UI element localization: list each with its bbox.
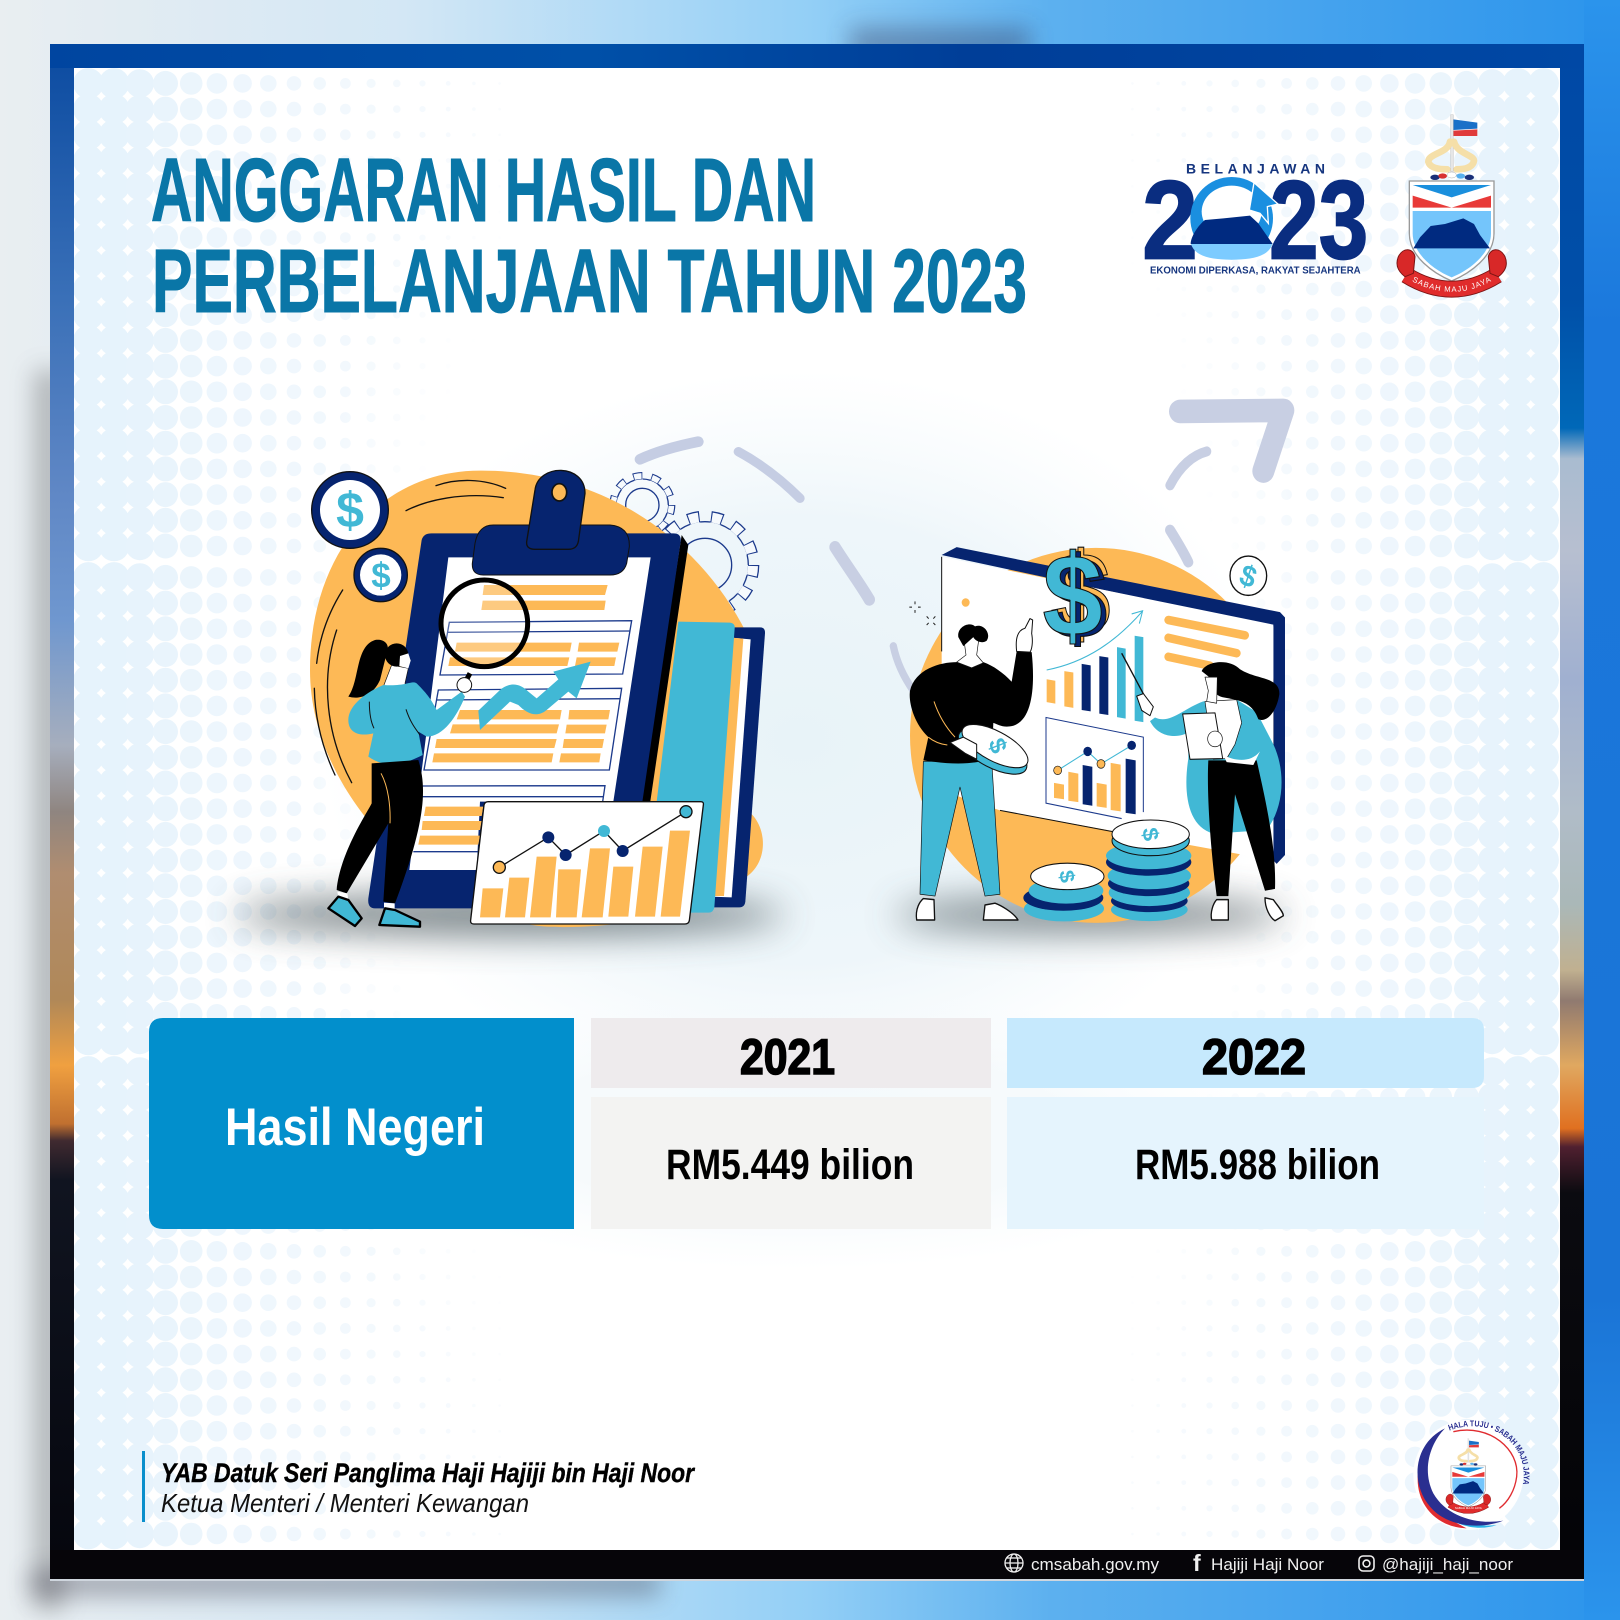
gears bbox=[613, 476, 754, 614]
man with coin: $ bbox=[983, 735, 1012, 758]
book and folder bbox=[643, 622, 765, 913]
logo: Hala Tuju Sabah Maju Jaya: HALA TUJU • SABAH MAJU JAYA bbox=[1448, 1420, 1530, 1484]
illustration: clipboard analysis bbox=[310, 442, 800, 927]
logo: Sabah state crest bbox=[1396, 114, 1507, 298]
2021 header bbox=[591, 1018, 991, 1088]
dashed arc marks bbox=[640, 442, 800, 498]
orange backdrop bbox=[910, 548, 1282, 923]
logo: Belanjawan 2023: BELANJAWAN bbox=[1186, 160, 1325, 176]
2022 header: 2022 bbox=[1202, 1029, 1306, 1085]
footer social links: @hajiji_haji_noor bbox=[1382, 1555, 1513, 1574]
table: Hasil Negeri bbox=[149, 1018, 1484, 1229]
magnifier bbox=[441, 580, 528, 687]
title: PERBELANJAAN TAHUN 2023 bbox=[152, 232, 1027, 332]
sparkles bbox=[909, 601, 935, 625]
board text lines bbox=[1168, 620, 1245, 666]
attribution: YAB Datuk Seri Panglima Haji Hajiji bin Haji Noor bbox=[161, 1458, 695, 1488]
2022 header bbox=[1007, 1018, 1484, 1088]
man with coin bbox=[910, 619, 1033, 920]
small coin: $ bbox=[1235, 559, 1260, 595]
logo: Hala Tuju Sabah Maju Jaya: SABAH MAJU JAYA bbox=[1455, 1506, 1482, 1510]
chart card bbox=[471, 802, 703, 924]
attribution: Ketua Menteri / Menteri Kewangan bbox=[161, 1488, 529, 1518]
coins: $ bbox=[336, 482, 364, 538]
coin stacks bbox=[1023, 820, 1191, 921]
logo: Belanjawan 2023: EKONOMI DIPERKASA, RAKYAT SEJAHTERA bbox=[1150, 265, 1361, 276]
dollar sign: $ bbox=[1047, 532, 1107, 663]
2022 value bbox=[1007, 1097, 1484, 1229]
illustration: presentation board bbox=[835, 410, 1285, 923]
title bbox=[151, 141, 1027, 332]
dollar sign: $ bbox=[1051, 528, 1111, 658]
icon: globe bbox=[1005, 1554, 1023, 1572]
document rows bbox=[418, 585, 619, 845]
2021 value: RM5.449 bilion bbox=[666, 1141, 914, 1189]
logo: Hala Tuju Sabah Maju Jaya bbox=[1414, 1420, 1530, 1530]
coins: $ bbox=[371, 556, 391, 595]
presentation board bbox=[942, 547, 1285, 864]
2021 header: 2021 bbox=[740, 1029, 835, 1085]
upward arrow marks bbox=[835, 410, 1283, 691]
small chart bbox=[1046, 717, 1143, 819]
row label cell bbox=[149, 1018, 574, 1229]
small coin bbox=[1230, 556, 1267, 595]
clipboard bbox=[368, 470, 688, 908]
coin stacks: $ bbox=[1137, 826, 1164, 843]
footer social links bbox=[1005, 1550, 1513, 1576]
icon: instagram bbox=[1359, 1556, 1374, 1571]
woman with pointer bbox=[1122, 653, 1283, 921]
title: ANGGARAN HASIL DAN bbox=[151, 141, 816, 241]
attribution bbox=[142, 1451, 695, 1522]
logo: Sabah state crest: SABAH MAJU JAYA bbox=[1412, 277, 1492, 292]
footer social links: cmsabah.gov.my bbox=[1031, 1555, 1160, 1574]
bar chart bbox=[1047, 611, 1143, 722]
footer social links: Hajiji Haji Noor bbox=[1211, 1555, 1324, 1574]
dollar sign: $ bbox=[1043, 530, 1103, 661]
coins bbox=[312, 472, 407, 602]
logo: Belanjawan 2023: 23 bbox=[1269, 158, 1368, 283]
icon: facebook: f bbox=[1193, 1550, 1201, 1576]
orange backdrop bbox=[310, 471, 763, 927]
logo: Belanjawan 2023: 2 bbox=[1142, 158, 1198, 283]
thin arcs bbox=[314, 480, 506, 783]
coin stacks: $ bbox=[1054, 869, 1079, 884]
woman with magnifier bbox=[328, 640, 472, 927]
ground shadows bbox=[235, 895, 1285, 935]
trend arrow bbox=[478, 662, 591, 730]
2022 value: RM5.988 bilion bbox=[1135, 1141, 1380, 1189]
row label cell: Hasil Negeri bbox=[225, 1098, 485, 1157]
logo: Belanjawan 2023 bbox=[1142, 158, 1368, 283]
2021 value bbox=[591, 1097, 991, 1229]
